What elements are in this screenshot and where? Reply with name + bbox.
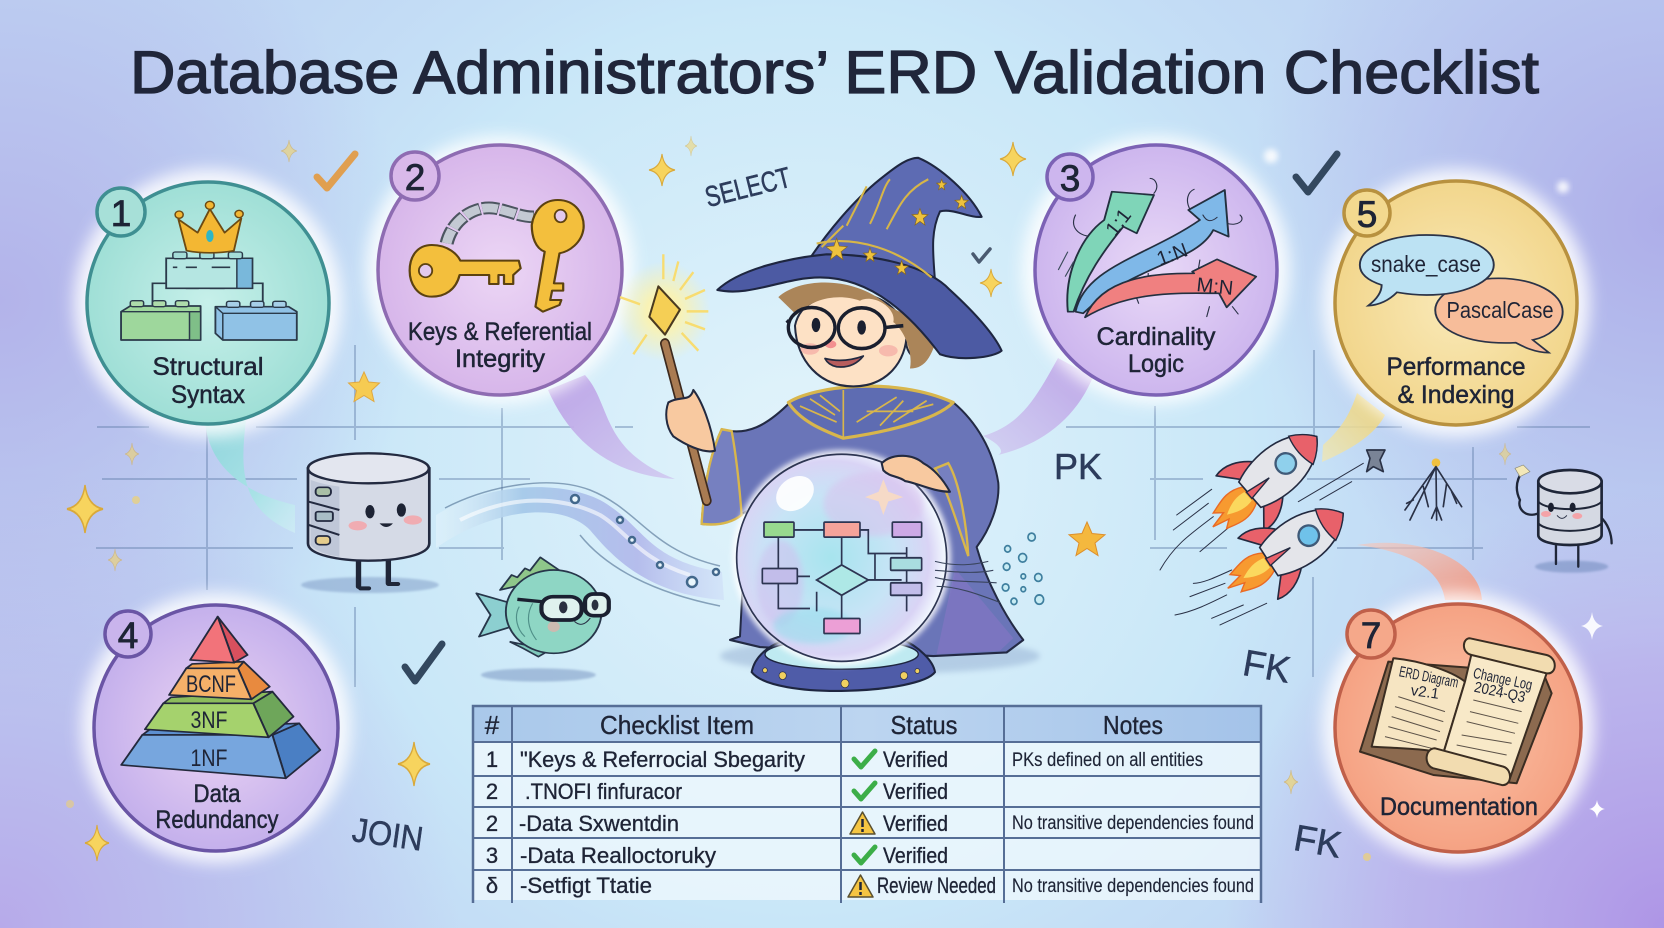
index tree icon <box>1405 458 1462 520</box>
checklist items: -Data Sxwentdin <box>519 811 679 836</box>
notes: PKs defined on all entities <box>1012 750 1203 771</box>
status text: Review Needed <box>877 873 996 898</box>
wizard character with crystal ball <box>617 158 1044 691</box>
badge 3 <box>1047 154 1093 200</box>
wand <box>665 344 707 501</box>
checklist items: .TNOFI finfuracor <box>525 779 682 804</box>
label <box>1386 353 1526 409</box>
check marks <box>317 154 1337 681</box>
badge 5: 5 <box>1357 194 1377 235</box>
robe cuffs <box>702 429 742 525</box>
badge 7 <box>1347 610 1395 658</box>
icon: open book and scroll: 2024-Q3 <box>1472 679 1527 706</box>
badge 7: 7 <box>1361 615 1381 656</box>
status text: Verified <box>883 779 948 804</box>
flow ribbon: circle 3 to wizard <box>983 358 1093 455</box>
fish character with glasses <box>476 557 609 682</box>
label: Structural <box>152 353 264 381</box>
table header: Checklist Item <box>600 710 754 740</box>
cursor arrow <box>1367 450 1385 472</box>
icon: snake case speech bubble <box>1360 235 1494 306</box>
label: Syntax <box>171 381 245 409</box>
panel: 4 data redundancy <box>81 593 351 863</box>
cardinality labels <box>1102 205 1234 300</box>
wizard robe <box>702 402 1023 656</box>
badge 1 <box>97 188 145 236</box>
glasses <box>787 307 903 349</box>
flow ribbon: circle 2 to wizard <box>548 375 675 479</box>
wand glow <box>617 254 710 361</box>
flow ribbon: circle 1 to database <box>205 420 295 533</box>
icon: open book and scroll <box>1360 638 1555 785</box>
checklist items: -Data Realloctoruky <box>520 843 716 868</box>
flow ribbon: database to crystal ball <box>436 483 724 606</box>
row numbers: 2 <box>486 779 498 804</box>
icon: open book and scroll: v2.1 <box>1410 682 1440 703</box>
database character right <box>1515 465 1612 573</box>
notes <box>1012 750 1254 897</box>
row numbers: 3 <box>486 843 498 868</box>
icon: normalization pyramid: BCNF <box>186 671 236 698</box>
checklist items <box>519 747 805 898</box>
cardinality labels: 1:N <box>1154 239 1191 271</box>
database character left <box>301 453 439 593</box>
badge 5 <box>1344 190 1390 236</box>
icon: open book and scroll: Change Log <box>1472 665 1534 694</box>
status icons <box>848 751 875 897</box>
label: Cardinality <box>1096 323 1216 351</box>
badge 4: 4 <box>118 615 138 656</box>
icon: cardinality arrows <box>1058 178 1256 317</box>
status text: Verified <box>883 747 948 772</box>
icon: crown on lego blocks <box>121 201 297 340</box>
table header: Status <box>890 710 958 740</box>
floating SQL keyword: JOIN: JOIN <box>350 811 426 859</box>
panel: 2 keys and referential integrity <box>366 136 634 404</box>
icon: chained gold keys <box>410 200 584 312</box>
table header: Notes <box>1103 710 1163 740</box>
floating SQL keyword: PK: PK <box>1054 446 1102 487</box>
flow ribbon: rockets to circle 7 <box>1357 543 1482 600</box>
status text <box>877 747 996 898</box>
label <box>152 353 264 409</box>
icon: pascal case speech bubble <box>1435 278 1563 353</box>
notes: No transitive dependencies found <box>1012 876 1254 897</box>
badge 4 <box>105 611 151 657</box>
checklist table <box>473 706 1261 903</box>
row numbers: δ <box>486 873 498 898</box>
badge 2 <box>391 152 439 200</box>
wizard hat <box>717 158 1002 358</box>
ERD diagram inside ball <box>762 522 922 634</box>
icon: normalization pyramid: 1NF <box>190 745 228 772</box>
label: Keys & Referential <box>408 318 592 346</box>
badge 1: 1 <box>111 193 131 234</box>
label: & Indexing <box>1398 381 1514 409</box>
crystal ball base <box>752 638 935 691</box>
floating SQL keyword: FK lower: FK <box>1291 817 1345 866</box>
icon: normalization pyramid <box>121 617 320 778</box>
floating SQL keyword: SELECT: SELECT <box>702 162 794 214</box>
row numbers <box>486 747 498 898</box>
badge 3: 3 <box>1060 158 1080 199</box>
crystal ball <box>732 450 951 666</box>
collar <box>788 386 953 438</box>
face <box>778 283 940 386</box>
panel: 7 documentation <box>1322 592 1594 864</box>
status text: Verified <box>883 843 948 868</box>
icon: normalization pyramid: 3NF <box>190 707 228 734</box>
label <box>156 780 279 834</box>
wand hand <box>666 390 715 451</box>
label <box>408 318 592 373</box>
status text: Verified <box>883 811 948 836</box>
icon: pascal case speech bubble: PascalCase <box>1446 297 1554 323</box>
row numbers: 1 <box>486 747 498 772</box>
icon: snake case speech bubble: snake_case <box>1371 251 1481 277</box>
label <box>1096 323 1216 378</box>
floating SQL keyword: FK upper: FK <box>1240 642 1294 691</box>
rocket 1 <box>1188 408 1341 555</box>
rocket 2 <box>1207 482 1363 620</box>
row numbers: 2 <box>486 811 498 836</box>
label: Data <box>194 780 241 808</box>
cardinality labels: 1:1 <box>1102 205 1136 240</box>
title: Database Administrators’ ERD Validation Checklist <box>130 39 1539 106</box>
label: Documentation <box>1380 793 1538 821</box>
notes: No transitive dependencies found <box>1012 813 1254 834</box>
label: Performance <box>1386 353 1526 381</box>
checklist items: -Setfigt Ttatie <box>520 873 652 898</box>
cardinality labels: M:N <box>1196 274 1234 300</box>
data particles <box>935 533 1044 605</box>
badge 2: 2 <box>405 157 425 198</box>
label: Integrity <box>455 345 545 373</box>
flow ribbon: circle 5 to rockets <box>1322 393 1385 462</box>
sparkles and stars <box>66 136 1511 861</box>
rockets <box>1160 408 1462 625</box>
panel: 1 structural syntax <box>74 169 342 437</box>
panel: 5 performance and indexing <box>1322 169 1590 437</box>
table header <box>485 710 1163 740</box>
label: Redundancy <box>156 806 279 834</box>
icon: open book and scroll: ERD Diagram <box>1398 663 1460 692</box>
panel: 3 cardinality logic <box>1022 136 1290 404</box>
white glints <box>1264 149 1605 818</box>
ball hand <box>882 456 950 492</box>
label: Logic <box>1128 350 1184 378</box>
checklist items: "Keys & Referrocial Sbegarity <box>520 747 805 772</box>
table header: # <box>485 710 500 740</box>
